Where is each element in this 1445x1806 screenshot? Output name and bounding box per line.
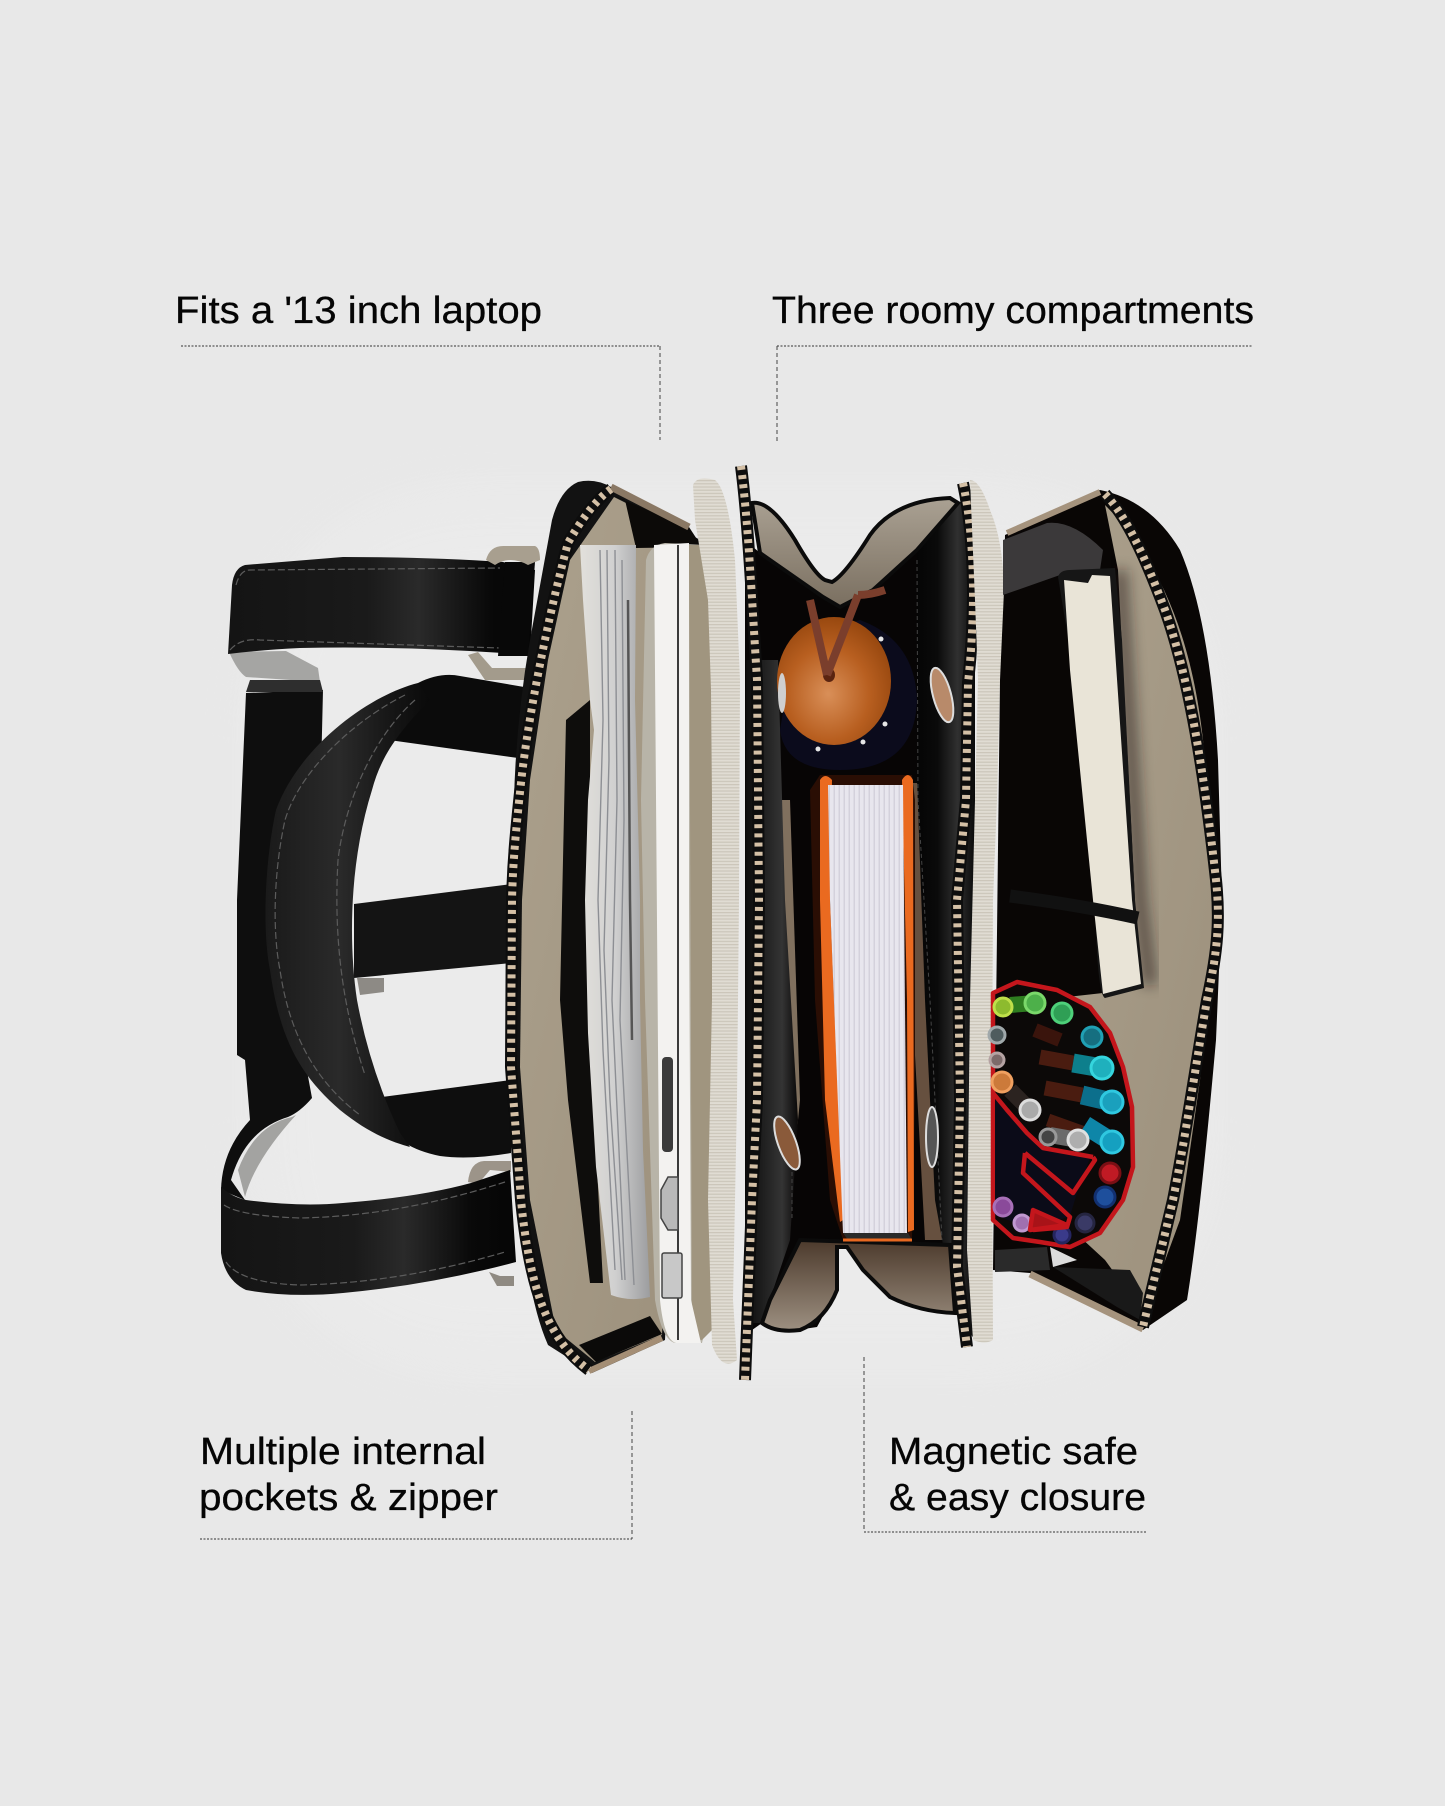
right compartment (993, 490, 1222, 1330)
pages (828, 785, 907, 1233)
snap: lower right (926, 1107, 938, 1167)
snap: lower left (769, 1114, 805, 1172)
left shiny panel (745, 660, 798, 1323)
pocket stitching strip (560, 700, 603, 1283)
red seam and flap (993, 1093, 1095, 1230)
magazine (580, 545, 650, 1299)
back strap vertical (221, 651, 323, 1200)
buckles (357, 546, 540, 1286)
lining bottom of middle compartment (762, 1240, 955, 1331)
bottom pocket (579, 1316, 662, 1362)
middle compartment (745, 500, 975, 1340)
rope (810, 590, 885, 675)
side lining right (912, 783, 945, 1240)
elastic band (1010, 896, 1138, 918)
grommet dots (816, 636, 888, 752)
pen barrels (1010, 1003, 1112, 1142)
bottom rim (1030, 1274, 1143, 1329)
label text: Magnetic safe (889, 1431, 1138, 1473)
top rim (1007, 492, 1100, 533)
label text: Three roomy compartments (772, 290, 1254, 332)
bottom strap (221, 1170, 516, 1295)
orange book (810, 775, 915, 1240)
top flap (1003, 523, 1103, 595)
snap: upper right (926, 666, 958, 724)
callout: magnetic safe and easy closure (864, 1357, 1146, 1532)
cloth bundle (780, 620, 917, 770)
port: hdmi (661, 1177, 678, 1230)
side lining left (773, 800, 800, 1250)
bag illustration (221, 466, 1222, 1380)
leader line (864, 1357, 1146, 1532)
dark pocket top (611, 495, 702, 548)
lining (1040, 505, 1213, 1315)
left shell (509, 481, 702, 1373)
cream divider two (967, 480, 1004, 1342)
divider one zipper (741, 466, 759, 1380)
wooden ball (777, 590, 891, 752)
small notebook (1010, 568, 1144, 998)
divider two zipper (957, 483, 973, 1347)
cream divider one (693, 478, 740, 1364)
label text: & easy closure (889, 1477, 1146, 1519)
lid back (689, 545, 712, 1340)
bottom flap (995, 1247, 1050, 1272)
leader line (200, 1411, 632, 1539)
red pen case (989, 982, 1133, 1247)
label text: Fits a '13 inch laptop (175, 290, 542, 332)
label text: Multiple internal (200, 1431, 486, 1473)
snap: upper left (778, 673, 786, 713)
leader line (181, 346, 660, 440)
middle strap (354, 884, 512, 978)
lining shadow (1120, 570, 1150, 985)
zipper (511, 489, 611, 1370)
curved handle (265, 675, 530, 1157)
port: usb (662, 1253, 682, 1298)
laptop (641, 543, 712, 1343)
callout: multiple internal pockets and zipper (199, 1411, 632, 1539)
port: sd slot (662, 1057, 673, 1152)
pen caps (989, 993, 1123, 1243)
right shiny panel (917, 500, 975, 1340)
rim (611, 487, 689, 527)
leader line (777, 346, 1252, 442)
halo behind bag (250, 490, 1210, 1370)
lower pocket (1053, 1267, 1143, 1320)
lower page (1050, 1247, 1077, 1267)
lower dark cloth (995, 1095, 1090, 1230)
white body (654, 543, 701, 1343)
lining (520, 497, 700, 1362)
lining top of middle compartment (752, 498, 958, 607)
top strap (228, 557, 535, 656)
label text: pockets & zipper (199, 1477, 498, 1519)
zipper (1105, 494, 1218, 1327)
